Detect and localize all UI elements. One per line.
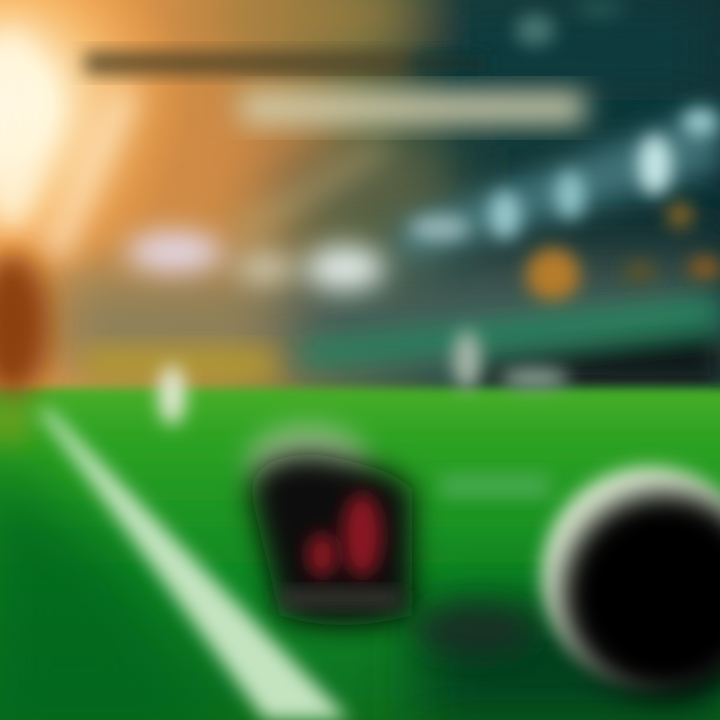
stand lights band xyxy=(395,105,720,262)
dark smudge beside helmet xyxy=(415,604,535,656)
yellow lower stand xyxy=(85,350,275,380)
orange object at left xyxy=(0,253,50,443)
dark helmet xyxy=(248,426,412,625)
green stand stripe and dark shadow xyxy=(300,298,720,385)
background: sky and stands xyxy=(0,0,720,400)
grass field xyxy=(0,388,720,720)
diagonal light streak xyxy=(225,140,395,245)
sun flare xyxy=(0,0,190,290)
top right light spots xyxy=(515,0,625,46)
pale heading blur xyxy=(240,92,585,124)
dark ball at right xyxy=(542,467,720,697)
dark header bar xyxy=(85,52,485,74)
mid white highlights xyxy=(127,232,385,290)
white field line xyxy=(38,410,350,720)
orange lights right xyxy=(526,202,720,302)
distant players xyxy=(158,330,570,425)
